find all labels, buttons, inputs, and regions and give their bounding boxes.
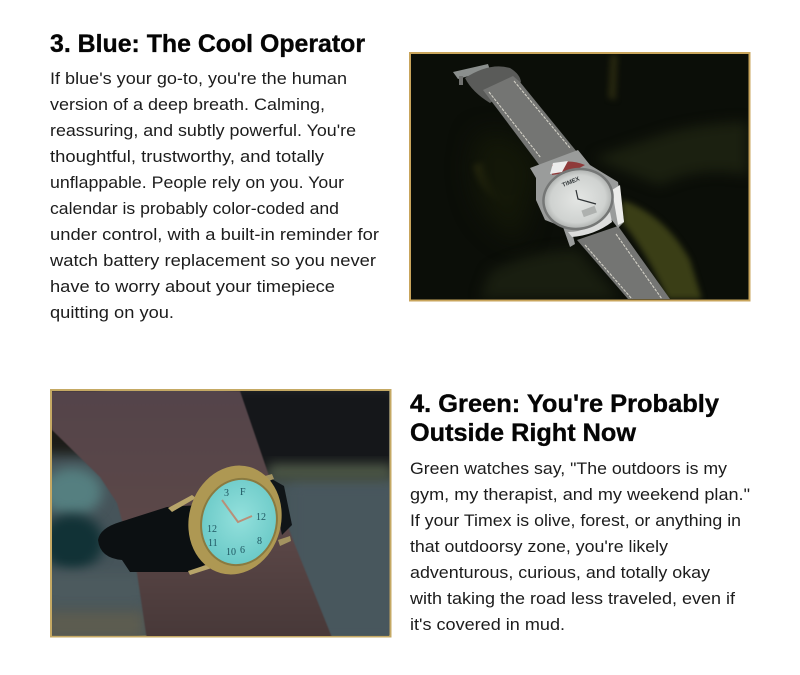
- section 4 body text: gym, my therapist, and my weekend plan.": [410, 485, 750, 504]
- section 3 body text: calendar is probably color-coded and: [50, 199, 339, 218]
- section 3 body text: quitting on you.: [50, 303, 174, 322]
- turquoise dial: 12: [207, 524, 217, 535]
- watch dial: [544, 170, 612, 228]
- turquoise dial: 11: [208, 538, 218, 549]
- section 3 body text: unflappable. People rely on you. Your: [50, 173, 344, 192]
- section 3 body text: under control, with a built-in reminder for: [50, 225, 379, 244]
- section 3 body text: [49, 69, 379, 322]
- turquoise dial: F: [240, 487, 246, 498]
- section 3 body text: watch battery replacement so you never: [49, 251, 376, 270]
- upper strap: [453, 64, 577, 170]
- velvet folds: [472, 55, 748, 299]
- turquoise dial: 12: [256, 512, 266, 523]
- section 4 body text: If your Timex is olive, forest, or anything in: [410, 511, 741, 530]
- section 4 body text: adventurous, curious, and totally okay: [410, 563, 711, 582]
- section 4 body text: with taking the road less traveled, even if: [409, 589, 735, 608]
- lower strap: [577, 226, 670, 299]
- section 4 body text: [409, 459, 750, 634]
- section 3 body text: have to worry about your timepiece: [50, 277, 335, 296]
- section 4 body text: that outdoorsy zone, you're likely: [410, 537, 669, 556]
- gold case: [168, 466, 291, 575]
- section 4 heading: 4. Green: You're Probably: [410, 390, 719, 418]
- turquoise dial: [202, 480, 276, 564]
- turquoise dial: 10: [226, 547, 236, 558]
- watch case: [530, 150, 624, 247]
- section 3 body text: reassuring, and subtly powerful. You're: [50, 121, 356, 140]
- section 4 body text: Green watches say, "The outdoors is my: [410, 459, 728, 478]
- section 4 heading: Outside Right Now: [410, 419, 637, 447]
- section 4 heading: [410, 390, 719, 447]
- section 3 body text: version of a deep breath. Calming,: [50, 95, 325, 114]
- black leather strap: [98, 505, 215, 572]
- turquoise dial: 3: [224, 488, 229, 499]
- photo: silver watch with grey strap on dark velvet: [410, 53, 750, 300]
- arm: [48, 391, 333, 640]
- section 3 body text: thoughtful, trustworthy, and totally: [50, 147, 325, 166]
- blurred background: [52, 391, 389, 636]
- turquoise dial: 8: [257, 536, 262, 547]
- turquoise dial: 6: [240, 545, 245, 556]
- watch dial: TIMEX: [562, 176, 581, 189]
- photo: gold watch with turquoise dial on wrist: [40, 385, 400, 642]
- section 4 body text: it's covered in mud.: [410, 615, 565, 634]
- section 3 heading: 3. Blue: The Cool Operator: [50, 30, 365, 58]
- section 3 body text: If blue's your go-to, you're the human: [50, 69, 347, 88]
